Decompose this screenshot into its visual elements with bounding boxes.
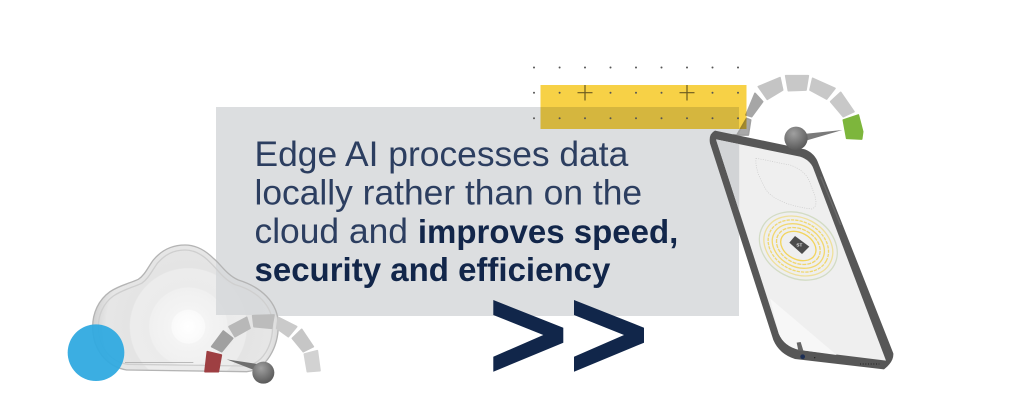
icon: smartphone with speed gauge (710, 76, 893, 369)
screen shadowed by gray panel (716, 140, 740, 210)
phone charging port details (797, 342, 879, 364)
blue circle (68, 324, 124, 381)
phone side buttons (821, 177, 841, 225)
heading text: Edge AI processes data (254, 134, 629, 174)
heading text: locally rather than on the (254, 172, 642, 212)
arrows: double chevron (493, 300, 644, 372)
needle and pivot (784, 127, 842, 150)
gauge segments (205, 315, 320, 372)
chip: ST (796, 243, 802, 248)
icon: cloud with speed gauge (68, 230, 320, 384)
chip (789, 236, 809, 254)
heading text: cloud and improves speed, (254, 211, 678, 251)
phone body (710, 131, 893, 369)
panel: yellow highlight band (540, 85, 746, 129)
phone screen (716, 139, 886, 361)
dot grid with plus marks (533, 66, 739, 119)
panel: gray text background (216, 107, 739, 316)
dotted cloud on screen (756, 158, 816, 209)
concentric signal rings (747, 199, 849, 293)
heading text: security and efficiency (254, 251, 611, 288)
phone gauge segments (733, 76, 863, 139)
gauge needle (227, 359, 274, 384)
cloud body (92, 244, 279, 372)
phone lower highlight (770, 298, 837, 355)
